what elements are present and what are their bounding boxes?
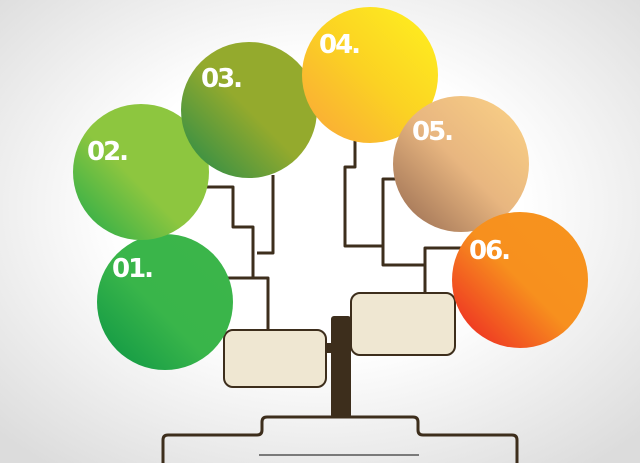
- base outline: [163, 417, 517, 463]
- circle 02: [73, 104, 209, 240]
- circle 05: [393, 96, 529, 232]
- circle 01: 01.: [112, 254, 152, 284]
- circle 04: 04.: [319, 30, 359, 60]
- circle 06: [452, 212, 588, 348]
- right text box: [351, 293, 455, 355]
- circle 02: 02.: [87, 137, 127, 167]
- circle 03: [181, 42, 317, 178]
- circle 01: [97, 234, 233, 370]
- left text box: [224, 330, 326, 387]
- circle 05: 05.: [412, 117, 452, 147]
- circle 04: [302, 7, 438, 143]
- base underline: [259, 454, 419, 456]
- trunk: [322, 316, 351, 418]
- circle 06: 06.: [469, 236, 509, 266]
- circle 03: 03.: [201, 64, 241, 94]
- connector lines: [205, 138, 470, 330]
